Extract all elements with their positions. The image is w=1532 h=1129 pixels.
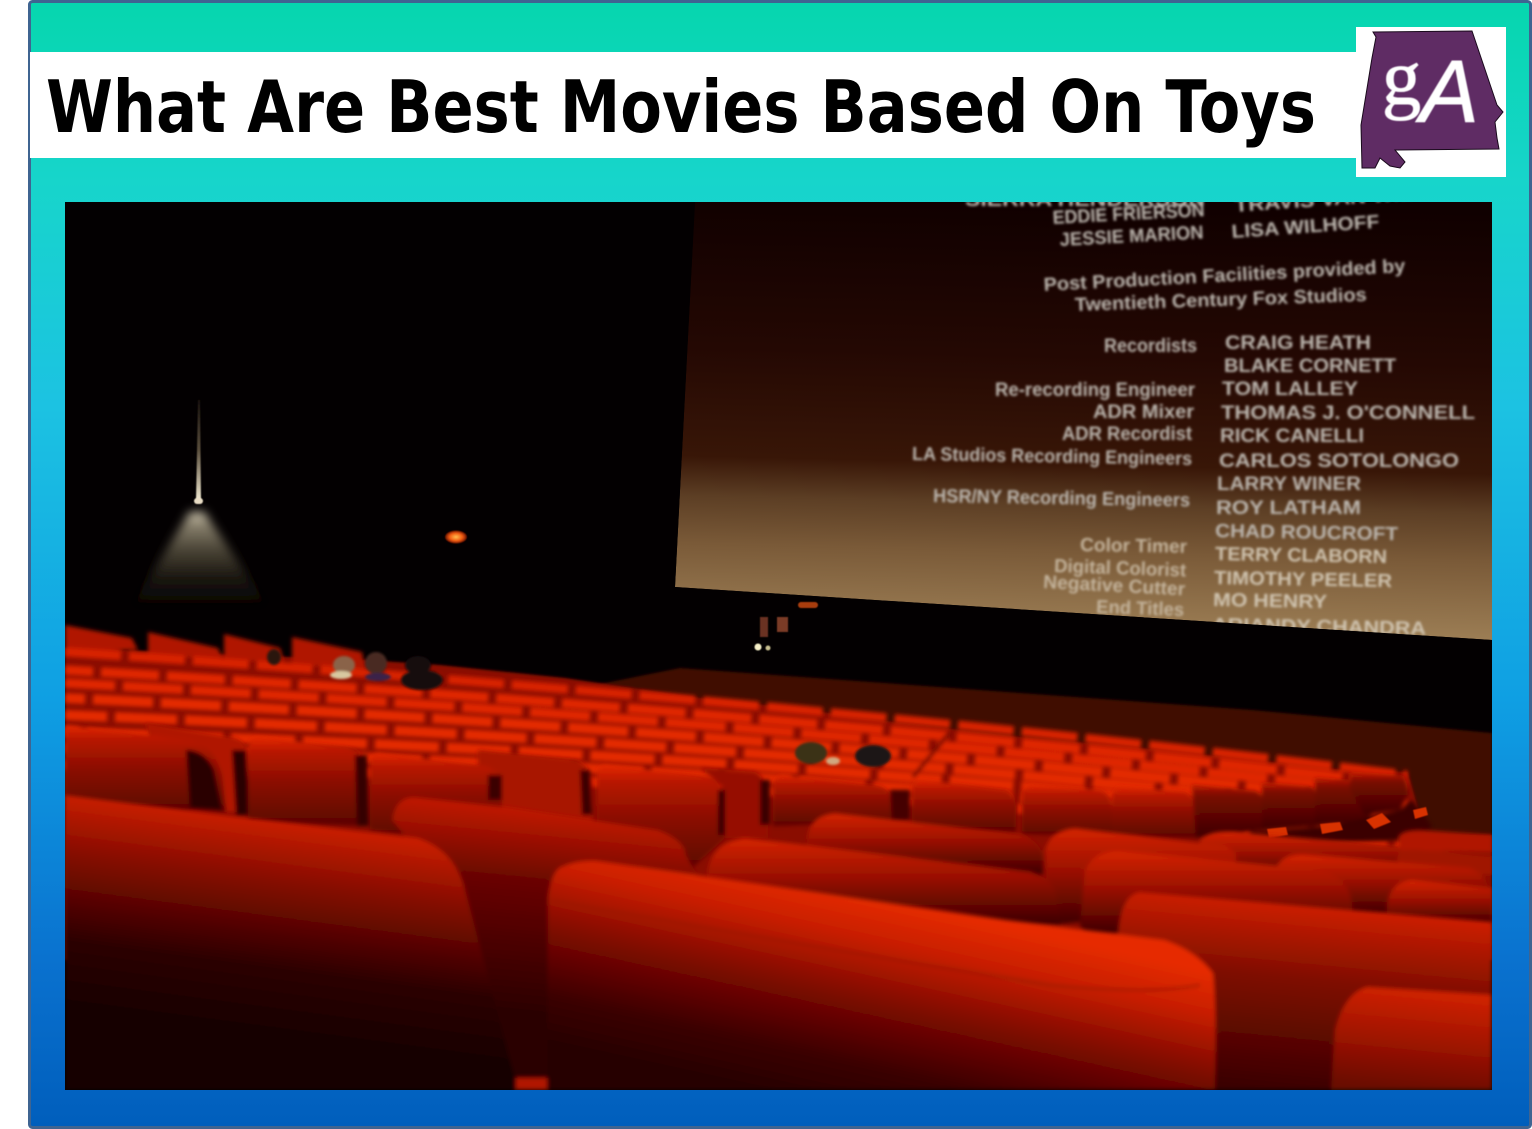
rolling credits [912, 183, 1475, 640]
rolling credits: ROY LATHAM [1216, 498, 1361, 519]
rolling credits: Negative Cutter [1043, 572, 1186, 600]
seat: bottom right corner [1331, 987, 1492, 1090]
logo: gA on Alabama outline [1356, 27, 1506, 177]
wall lamp [132, 400, 268, 605]
rolling credits: BLAKE CORNETT [1224, 356, 1396, 377]
rolling credits: End Titles [1096, 597, 1185, 621]
rolling credits: TERRY CLABORN [1215, 544, 1387, 568]
seat: behind left [392, 797, 700, 1090]
title: What Are Best Movies Based On Toys [46, 65, 1316, 149]
rolling credits: Post Production Facilities provided by [1043, 256, 1406, 296]
middle row seats [65, 723, 1432, 870]
rolling credits: ADR Mixer [1093, 402, 1195, 423]
stage lights [754, 602, 818, 650]
auditorium floor [560, 668, 1492, 860]
rolling credits: JESSIE MARION [1059, 222, 1204, 251]
seat: behind right [1117, 892, 1492, 1090]
rolling credits: TOM LALLEY [1222, 379, 1358, 400]
rolling credits: Twentieth Century Fox Studios [1074, 285, 1367, 316]
rolling credits: Recordists [1104, 336, 1197, 357]
rolling credits: MO HENRY [1213, 590, 1328, 613]
rolling credits: THOMAS J. O'CONNELL [1221, 403, 1475, 424]
seat: far left [65, 795, 518, 1090]
rolling credits: Re-recording Engineer [995, 380, 1196, 401]
audience members [267, 649, 891, 767]
logo letters: A [1415, 42, 1479, 141]
front right seat rows [707, 813, 1492, 935]
icon: Alabama state shape [1361, 31, 1503, 168]
rolling credits: LA Studios Recording Engineers [912, 444, 1192, 470]
rolling credits: Digital Colorist [1054, 556, 1187, 582]
rolling credits: RICK CANELLI [1220, 426, 1364, 447]
foreground seats [65, 795, 1492, 1090]
title band [30, 52, 1356, 158]
rolling credits: SIERRA HENDERSON [965, 190, 1205, 211]
photo: cinema auditorium [65, 183, 1492, 1090]
rolling credits: CHAD ROUCROFT [1215, 521, 1399, 545]
seat seam line [838, 950, 1200, 993]
seating block base [65, 648, 1492, 960]
rolling credits: HSR/NY Recording Engineers [933, 486, 1190, 511]
rolling credits: ADR Recordist [1062, 424, 1193, 445]
rolling credits: CRAIG HEATH [1225, 333, 1371, 354]
rolling credits: TRAVIS VAN WIE [1234, 183, 1415, 217]
small red seat parts, right [1267, 807, 1428, 838]
floor glimpse [516, 1078, 548, 1090]
rolling credits: LARRY WINER [1217, 474, 1361, 495]
logo letters: g [1382, 34, 1421, 121]
rolling credits: ARIANDY CHANDRA [1212, 615, 1427, 640]
red exit light [445, 530, 467, 544]
rolling credits: TIMOTHY PEELER [1214, 568, 1393, 592]
far seat rows [65, 625, 1407, 845]
rolling credits: CARLOS SOTOLONGO [1219, 451, 1459, 472]
rolling credits: LISA WILHOFF [1231, 212, 1380, 243]
rolling credits: Color Timer [1080, 535, 1188, 558]
rolling credits: EDDIE FRIERSON [1052, 200, 1205, 229]
seat: center foreground [547, 861, 1216, 1090]
cinema screen with credits [675, 183, 1492, 640]
